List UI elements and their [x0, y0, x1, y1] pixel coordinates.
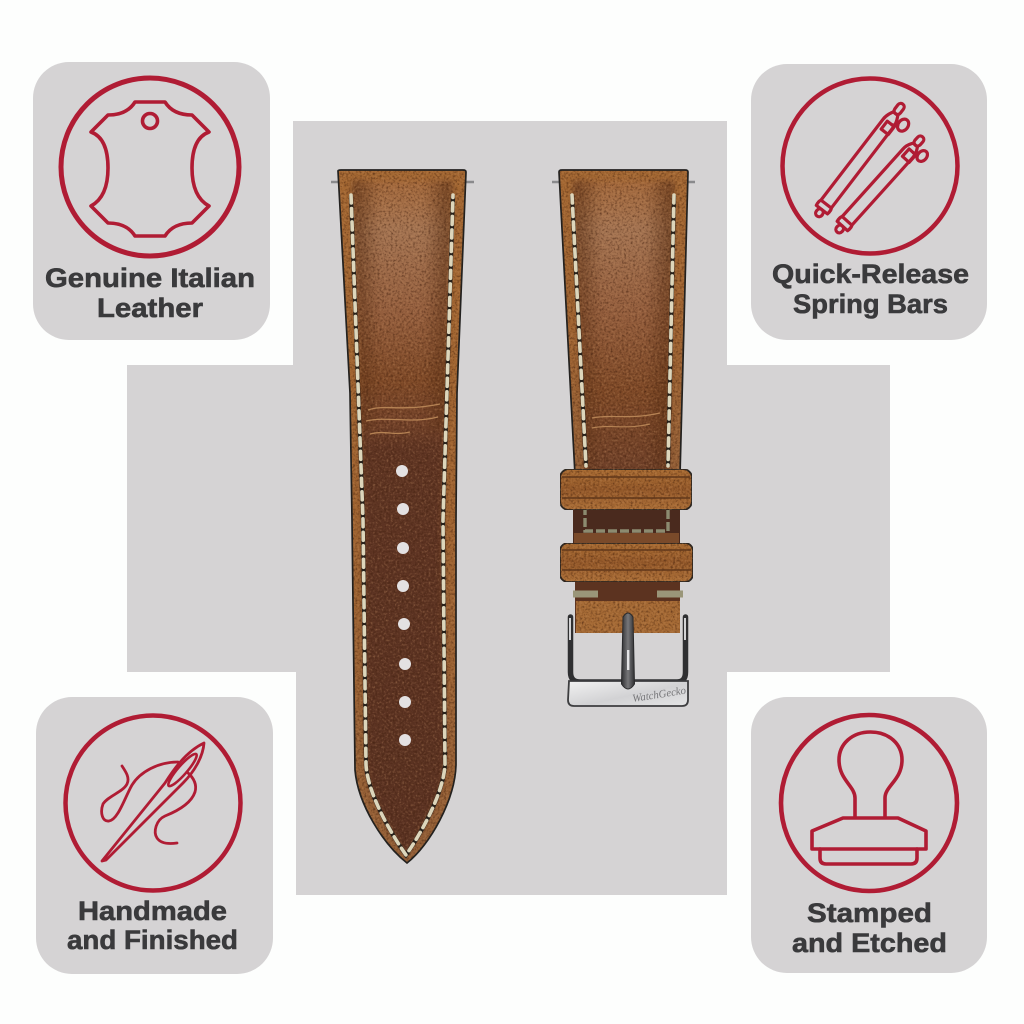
panel: genuine italian leather	[33, 62, 270, 340]
panel: handmade and finished	[36, 697, 273, 974]
lower strap tan band	[576, 601, 680, 633]
buckle stitches	[573, 590, 683, 598]
central grey cross backdrop	[127, 121, 890, 895]
icon: spring bars	[782, 78, 958, 254]
buckle bottom plate	[568, 681, 688, 706]
dark strap section between keepers	[573, 505, 680, 545]
label: Spring Bars	[793, 289, 948, 319]
lower keeper crease lines	[562, 550, 691, 570]
leather creases	[592, 413, 660, 428]
leather creases	[366, 404, 440, 434]
strap upper leather	[559, 170, 688, 480]
strap outline	[338, 170, 466, 863]
label: Quick-Release	[772, 259, 969, 289]
upper keeper crease lines	[562, 477, 690, 498]
icon: rubber stamp	[781, 715, 957, 891]
buckle	[568, 613, 688, 706]
label: and Finished	[67, 925, 238, 955]
upper keeper	[560, 469, 692, 510]
left watch strap: long piece	[331, 170, 474, 863]
label: Leather	[97, 293, 204, 323]
card background	[33, 62, 270, 340]
icon: leather hide	[61, 78, 239, 256]
label: Handmade	[78, 896, 227, 926]
label	[67, 896, 238, 955]
card background	[751, 697, 987, 973]
lower strap section	[575, 578, 680, 633]
strap spring bar pins	[331, 181, 474, 183]
label	[792, 898, 947, 958]
strap stitching	[572, 195, 674, 466]
buckle tongue	[622, 613, 634, 689]
strap spring bar pins	[552, 181, 695, 183]
buckle frame highlight	[570, 618, 685, 640]
strap stitching	[351, 195, 453, 855]
label: Stamped	[807, 898, 932, 928]
strap outline	[559, 170, 688, 475]
label: Genuine Italian	[45, 263, 255, 293]
label	[45, 263, 255, 323]
panel: stamped and etched	[751, 697, 987, 973]
buckle engraving: WatchGecko	[632, 685, 687, 705]
lower keeper	[560, 543, 693, 582]
strap leather body	[338, 170, 466, 863]
tongue highlight	[627, 650, 629, 670]
panel: quick-release spring bars	[751, 64, 987, 340]
stitch between keepers	[585, 506, 668, 531]
label: and Etched	[792, 928, 947, 958]
buckle frame	[570, 617, 686, 682]
right watch strap: buckle piece	[552, 170, 695, 706]
label	[772, 259, 969, 319]
tan band under stitch	[574, 533, 679, 545]
card background	[751, 64, 987, 340]
strap adjustment holes	[396, 465, 411, 746]
card background	[36, 697, 273, 974]
icon: needle and thread	[66, 716, 240, 890]
